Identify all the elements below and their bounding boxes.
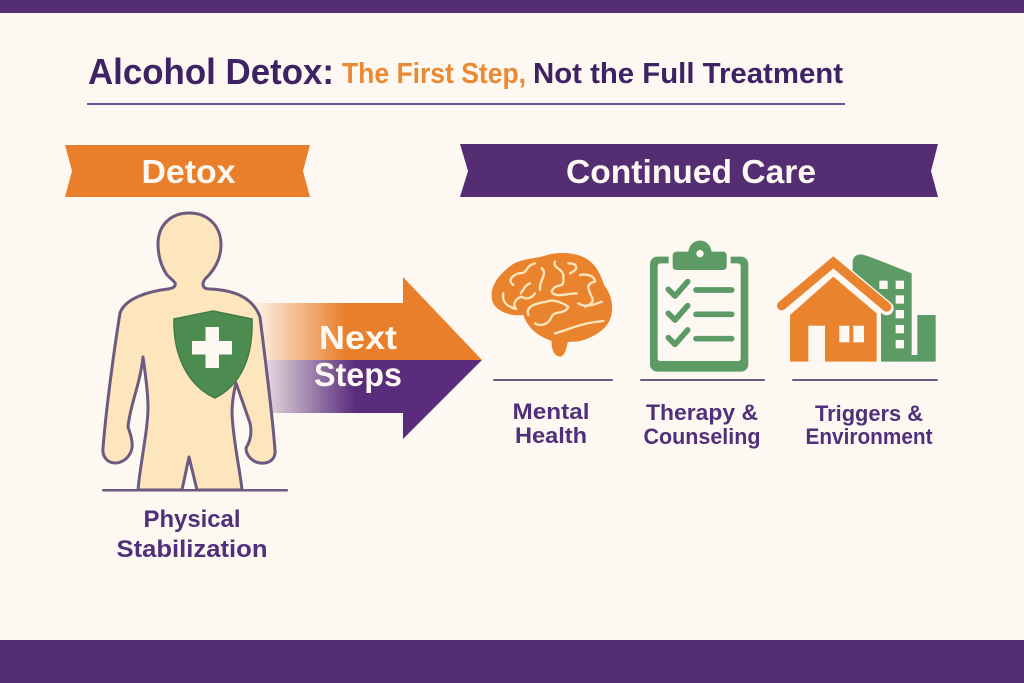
title	[88, 51, 843, 92]
label: physical stabilization	[116, 506, 268, 563]
label: mental health: Health	[515, 423, 587, 448]
icon: shield with cross	[174, 311, 252, 398]
arrow: next steps: Next	[319, 319, 397, 356]
banner: Continued Care: Continued Care	[566, 153, 816, 190]
top band	[0, 0, 1024, 13]
label: therapy and counseling	[644, 400, 760, 449]
label: physical stabilization: Physical	[144, 506, 240, 533]
icon: clipboard checklist	[650, 241, 748, 372]
banner: Continued Care	[460, 144, 938, 197]
arrow: next steps: Steps	[314, 356, 402, 393]
icon: house and city building	[782, 254, 936, 362]
title: Alcohol Detox:	[88, 51, 334, 92]
banner: Detox: Detox	[142, 153, 236, 190]
divider: therapy	[640, 379, 765, 381]
title: Not the Full Treatment	[533, 58, 843, 90]
arrow: next steps	[255, 277, 482, 439]
bottom band	[0, 640, 1024, 683]
divider: triggers	[792, 379, 938, 381]
divider: mental health	[493, 379, 613, 381]
label: triggers and environment	[806, 401, 933, 449]
label: triggers and environment: Triggers &	[815, 401, 923, 426]
label: mental health: Mental	[512, 399, 590, 424]
banner: Detox	[65, 145, 310, 197]
icon: brain	[492, 253, 612, 357]
title: The First Step,	[342, 58, 526, 90]
label: physical stabilization: Stabilization	[116, 536, 268, 563]
label: triggers and environment: Environment	[806, 424, 933, 449]
label: therapy and counseling: Counseling	[644, 424, 760, 449]
ground line: figure	[102, 489, 288, 492]
label: therapy and counseling: Therapy &	[646, 400, 758, 425]
label: mental health	[512, 399, 590, 448]
icon: human figure	[103, 213, 275, 490]
